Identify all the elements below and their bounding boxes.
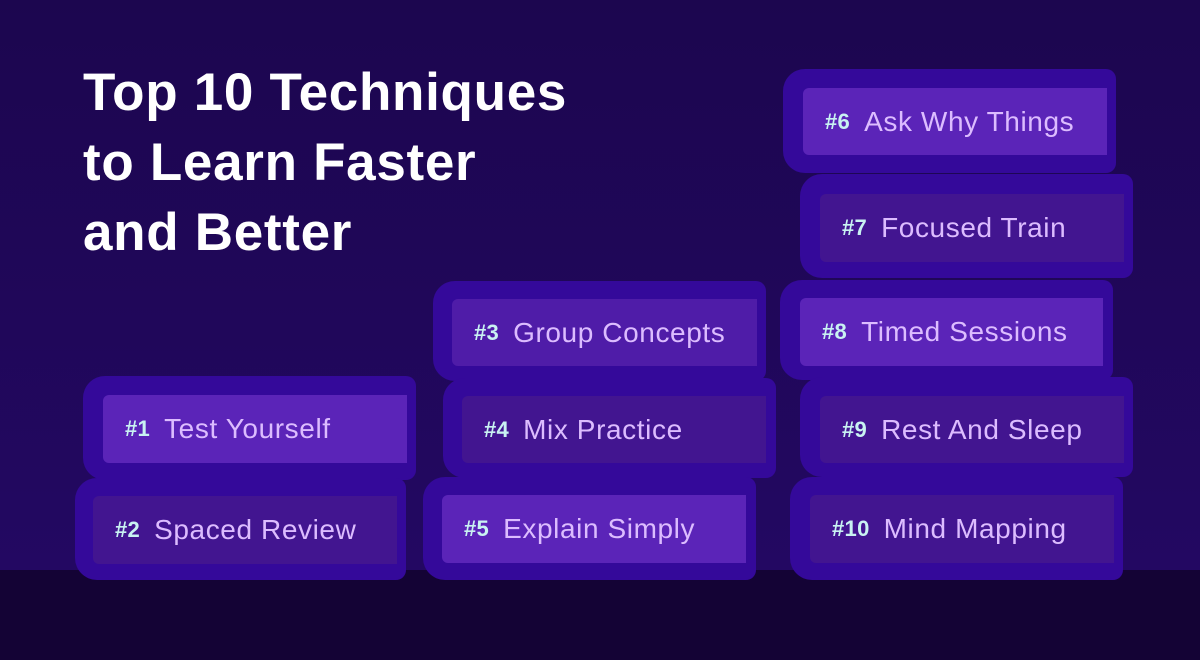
- book 4: #4: [484, 416, 509, 442]
- book 8: Timed Sessions: [861, 316, 1068, 347]
- book 1: #1: [125, 416, 150, 441]
- title: Top 10 Techniques: [83, 63, 567, 122]
- book 4: [443, 378, 776, 478]
- book 10: Mind Mapping: [884, 513, 1067, 544]
- book 8: #8: [822, 319, 847, 344]
- book 1: [83, 376, 416, 480]
- book 3: [433, 281, 766, 381]
- book 3: #3: [474, 320, 499, 344]
- book 9: [800, 377, 1133, 477]
- book 7: [800, 174, 1133, 278]
- book 10: [790, 477, 1123, 580]
- book 6: #6: [825, 108, 850, 134]
- book 7: #7: [842, 215, 867, 240]
- book 6: Ask Why Things: [864, 106, 1074, 136]
- book 2: [75, 478, 406, 580]
- book 9: Rest And Sleep: [881, 414, 1082, 444]
- title: to Learn Faster: [83, 133, 476, 192]
- book 2: #2: [115, 517, 140, 542]
- book 10: #10: [832, 516, 870, 541]
- book 5: [423, 477, 756, 580]
- book 9: #9: [842, 416, 867, 442]
- title: and Better: [83, 203, 352, 262]
- book 8: [780, 280, 1113, 380]
- title: [83, 63, 567, 262]
- book 7: Focused Train: [881, 212, 1066, 243]
- book 5: Explain Simply: [503, 513, 695, 544]
- book 1: Test Yourself: [164, 413, 331, 444]
- book 4: Mix Practice: [523, 414, 683, 444]
- book 2: Spaced Review: [154, 514, 356, 545]
- book 6: [783, 69, 1116, 173]
- book 5: #5: [464, 516, 489, 541]
- book 3: Group Concepts: [513, 316, 725, 348]
